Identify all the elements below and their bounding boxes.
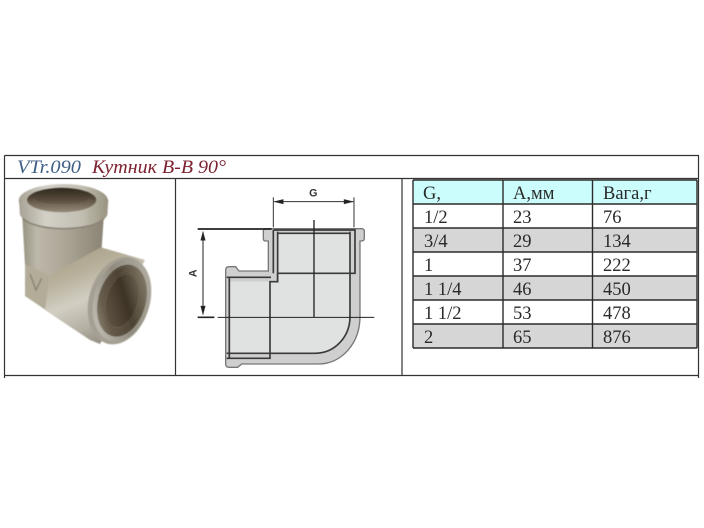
inner bore xyxy=(229,233,350,353)
side socket body xyxy=(45,247,145,344)
side rim xyxy=(78,249,161,352)
row 1 xyxy=(424,256,631,276)
row 1 1/2 xyxy=(424,304,631,324)
row 3/4: 3/4 xyxy=(424,232,448,252)
upper rim xyxy=(19,200,108,229)
row 1: 37 xyxy=(513,256,532,276)
hex flat mark xyxy=(25,264,50,310)
data table xyxy=(413,180,697,348)
label A: A xyxy=(187,269,199,277)
row 1 1/2: 478 xyxy=(603,304,631,324)
row 2: 2 xyxy=(424,328,433,348)
row 1 1/4: 1 1/4 xyxy=(424,280,462,300)
row 3/4: 134 xyxy=(603,232,631,252)
header labels xyxy=(423,184,652,204)
row 1 1/4: 450 xyxy=(603,280,631,300)
header labels: G, xyxy=(423,184,441,204)
table header xyxy=(413,180,697,204)
dimension G xyxy=(273,197,354,227)
upper socket body xyxy=(22,212,104,275)
row 1/2: 1/2 xyxy=(424,208,448,228)
row 1: 1 xyxy=(424,256,433,276)
title xyxy=(17,158,227,178)
header labels: A,мм xyxy=(513,184,555,204)
row 1: 222 xyxy=(603,256,631,276)
side opening xyxy=(89,259,155,342)
row 1 1/4 xyxy=(424,280,631,300)
photo: brass elbow fitting xyxy=(19,184,161,352)
title: VTr.090 xyxy=(17,158,82,178)
label G: G xyxy=(309,188,317,200)
centre lines xyxy=(218,220,374,317)
row 2 xyxy=(424,328,631,348)
header labels: Вага,г xyxy=(603,184,652,204)
row 2: 65 xyxy=(513,328,532,348)
shaded rows xyxy=(413,228,697,348)
title: Кутник В-В 90° xyxy=(91,158,227,178)
outer table frame xyxy=(4,156,698,378)
row 3/4 xyxy=(424,232,631,252)
row 1 1/2: 1 1/2 xyxy=(424,304,462,324)
thread and bore lines xyxy=(227,230,355,358)
row 1 1/2: 53 xyxy=(513,304,532,324)
row 2: 876 xyxy=(603,328,631,348)
diagram: elbow cross-section xyxy=(187,188,374,367)
row 1/2: 76 xyxy=(603,208,622,228)
row 3/4: 29 xyxy=(513,232,532,252)
upper opening xyxy=(27,188,96,212)
body outline xyxy=(226,229,364,367)
dimension A xyxy=(198,229,272,317)
row 1 1/4: 46 xyxy=(513,280,532,300)
row 1/2: 23 xyxy=(513,208,532,228)
row 1/2 xyxy=(424,208,622,228)
